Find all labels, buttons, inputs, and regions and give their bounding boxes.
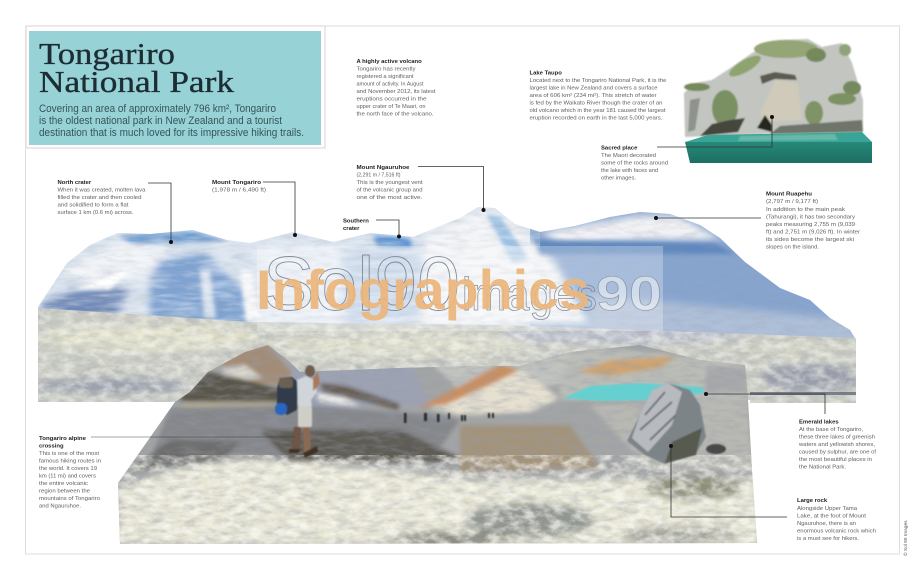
label: Emerald lakes: the most beautiful places in <box>799 457 872 463</box>
label: Tongariro alpine crossing: mountains of Tongariro <box>39 496 100 502</box>
title: Tongariro <box>39 36 175 71</box>
label: A highly active volcano: the north face of the volcano. <box>356 112 434 118</box>
label: Mount Ruapehu <box>654 192 860 250</box>
orange ridge <box>577 356 677 376</box>
label: Large rock: Large rock <box>797 498 828 504</box>
label: Lake Taupo <box>530 70 666 122</box>
label: A highly active volcano: and November 2012, its latest <box>356 89 436 95</box>
lake surface <box>685 132 872 142</box>
backpack <box>277 377 298 415</box>
label: Tongariro alpine crossing: crossing <box>39 444 64 450</box>
title: National Park <box>39 64 235 99</box>
label: North crater: surface 1 km (0.6 mi) across. <box>58 210 134 216</box>
leader line <box>148 183 171 242</box>
label: A highly active volcano: eruptions occurred in the <box>356 96 426 102</box>
label: Tongariro alpine crossing: and Ngauruhoe. <box>39 504 81 510</box>
leader line <box>671 446 787 517</box>
label: Lake Taupo: old volcano which in the year 181 caused the largest <box>530 108 666 114</box>
label: Sacred place: other images. <box>601 176 636 182</box>
label: Mount Tongariro: Mount Tongariro <box>212 180 261 186</box>
label: North crater: and solidified to form a flat <box>58 202 129 208</box>
title panel background <box>29 31 321 145</box>
label: A highly active volcano: upper crater of Te Maari, on <box>356 104 426 110</box>
label: Emerald lakes <box>704 392 877 470</box>
label: Emerald lakes: the National Park. <box>799 464 846 470</box>
label: Mount Ngauruhoe <box>356 165 486 212</box>
label: Tongariro alpine crossing <box>39 436 295 510</box>
watermark orange text: Infographics <box>256 258 590 321</box>
title panel <box>26 26 325 148</box>
mid ground <box>150 405 460 462</box>
label: A highly active volcano: amount of activity. In August <box>356 82 424 88</box>
label: Tongariro alpine crossing: region between the <box>39 488 90 494</box>
illustration: mountain range <box>30 200 870 405</box>
head and arm <box>305 365 315 377</box>
label: Large rock <box>669 444 876 542</box>
label: Tongariro alpine crossing: This is one of the most <box>39 451 100 457</box>
leader line <box>376 220 399 236</box>
label: Mount Ruapehu: Mount Ruapehu <box>766 192 812 198</box>
label: North crater: When it was created, molten lava <box>58 188 146 194</box>
mountains <box>38 207 855 338</box>
leader line <box>91 436 295 438</box>
title panel border <box>26 26 325 148</box>
emerald lake <box>563 383 705 401</box>
label: Mount Ruapehu: In addition to the main peak <box>766 207 845 213</box>
leader line <box>706 394 825 414</box>
label: Mount Ngauruhoe: Mount Ngauruhoe <box>356 165 410 171</box>
illustration: Lake Taupo cliff <box>684 39 872 163</box>
leader line <box>263 182 295 235</box>
label: Large rock: Alongside Upper Tama <box>797 506 857 512</box>
dark hill <box>222 345 292 385</box>
label: Mount Ruapehu: (Tahurangi), it has two secondary <box>766 214 855 220</box>
label: Lake Taupo: Located next to the Tongariro National Park, it is the <box>530 78 666 84</box>
label: Lake Taupo: area of 606 km² (234 mi²). This stretch of water <box>530 93 657 99</box>
label: Lake Taupo: is fed by the Waikato River though the crater of an <box>530 100 663 106</box>
label: Sacred place <box>601 115 774 182</box>
subtitle: destination that is much loved for its impressive hiking trails. <box>39 127 304 139</box>
copyright: © Sol 90 Images <box>902 520 909 556</box>
ridge <box>320 383 400 410</box>
label: North crater: filled the crater and then cooled <box>58 195 142 201</box>
label: A highly active volcano: Tongariro has recently <box>356 66 416 72</box>
label: Sacred place: some of the rocks around <box>601 160 668 166</box>
tan ground <box>460 425 600 472</box>
label: North crater <box>58 180 173 244</box>
label: Sacred place: The Maori decorated <box>601 153 656 159</box>
watermark panel <box>257 246 663 331</box>
label: Emerald lakes: Emerald lakes <box>799 420 839 426</box>
label: Mount Ruapehu: peaks measuring 2,755 m (9,039 <box>766 222 855 228</box>
label: Southern crater: crater <box>343 226 360 232</box>
label: Mount Ruapehu: (2,797 m / 9,177 ft) <box>766 199 818 205</box>
subtitle: is the oldest national park in New Zealand and a tourist <box>39 115 282 127</box>
label: Mount Ruapehu: its sides become the largest ski <box>766 237 854 243</box>
legs <box>291 427 301 452</box>
icon: main hiker <box>275 365 320 458</box>
label: Mount Tongariro <box>212 180 297 237</box>
label: A highly active volcano: A highly active volcano <box>356 59 422 65</box>
illustration: foreground terrain <box>110 340 770 550</box>
watermark outline text: Sol90 <box>263 242 460 327</box>
label: Emerald lakes: waters and yellowish shores, <box>798 442 876 448</box>
leader line <box>418 166 484 210</box>
watermark outline text: images <box>462 268 597 320</box>
shirt <box>297 376 317 406</box>
subtitle <box>39 103 304 139</box>
label: Lake Taupo: Lake Taupo <box>530 70 562 76</box>
leader line <box>656 217 761 219</box>
label: Mount Ngauruhoe: (2,291 m / 7,516 ft) <box>356 172 401 178</box>
label: North crater: North crater <box>58 180 92 186</box>
label: Tongariro alpine crossing: km (11 mi) and covers <box>39 474 96 480</box>
watermark outline text <box>263 242 662 327</box>
label: A highly active volcano <box>356 59 436 118</box>
icon: large rock <box>627 383 726 464</box>
label: Large rock: Ngauruhoe, there is an <box>797 521 856 527</box>
label: Tongariro alpine crossing: Tongariro alpine <box>39 436 87 442</box>
label: Mount Ngauruhoe: of the volcanic group and <box>356 188 422 194</box>
label: Emerald lakes: At the base of Tongariro, <box>799 427 864 433</box>
icon: distant hikers <box>404 413 494 423</box>
rocky mid band <box>30 305 860 405</box>
label: Mount Ngauruhoe: This is the youngest vent <box>356 180 423 186</box>
label: Sacred place: Sacred place <box>601 146 638 152</box>
label: Tongariro alpine crossing: famous hiking routes in <box>39 458 101 464</box>
cliff rock <box>684 39 863 137</box>
blue-grey slope behind hiker <box>290 366 430 407</box>
shorts <box>298 406 312 427</box>
label: Large rock: is a must see for hikers. <box>797 536 859 542</box>
label: Lake Taupo: largest lake in New Zealand and covers a surface <box>530 86 658 92</box>
label: Large rock: Lake, at the foot of Mount <box>797 514 867 520</box>
label: Emerald lakes: caused by sulphur, are one of <box>799 450 877 456</box>
label: Emerald lakes: these three lakes of greenish <box>799 434 875 440</box>
label: A highly active volcano: registered a significant <box>356 74 414 80</box>
label: Southern crater: Southern <box>343 218 369 224</box>
label: Mount Ruapehu: slopes on the island. <box>766 244 819 250</box>
watermark outline text: 90 <box>596 268 662 321</box>
watermark <box>256 242 663 331</box>
label: Southern crater <box>343 218 401 238</box>
label: Tongariro alpine crossing: the entire volcanic <box>39 481 88 487</box>
label: Mount Ngauruhoe: one of the most active. <box>356 195 422 201</box>
leader line <box>657 117 772 147</box>
lake water block <box>685 142 872 163</box>
label: Mount Tongariro: (1,978 m / 6,490 ft) <box>212 188 266 194</box>
label: Sacred place: the lake with faces and <box>601 168 658 174</box>
label: Lake Taupo: eruption recorded on earth in the last 5,000 years. <box>530 116 662 122</box>
subtitle: Covering an area of approximately 796 km², Tongariro <box>39 103 276 115</box>
title <box>39 36 235 99</box>
orange hill <box>430 370 560 415</box>
label: Tongariro alpine crossing: the world. It covers 19 <box>39 466 97 472</box>
label: Large rock: enormous volcanic rock which <box>797 528 876 534</box>
label: Mount Ruapehu: ft) and 2,751 m (9,026 ft). In winter <box>766 230 860 236</box>
